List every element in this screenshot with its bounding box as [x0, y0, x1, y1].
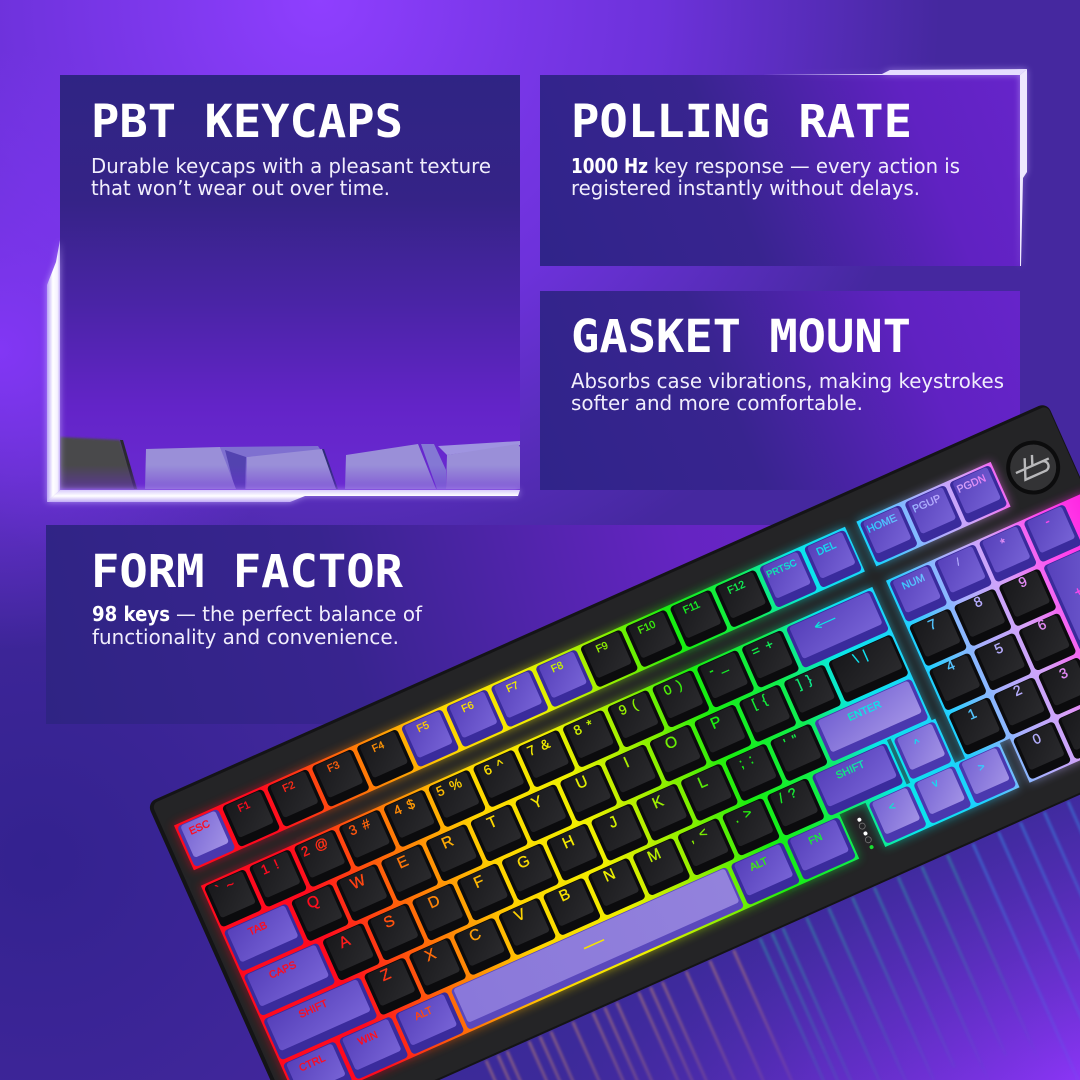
numeric keypad: 9 — [1016, 573, 1030, 591]
main key block: . > — [731, 804, 756, 826]
text: form factor description: — the perfect balance of — [176, 602, 423, 626]
main key block: CTRL — [297, 1052, 327, 1074]
navigation keys — [859, 465, 1008, 563]
main key block: P — [708, 713, 724, 733]
text: polling rate description: key response — every action is — [654, 154, 960, 178]
numeric keypad: NUM — [900, 572, 927, 593]
main key block: M — [645, 845, 664, 866]
function key row: F7 — [505, 679, 521, 695]
text: PBT keycaps description: Durable keycaps with a pleasant texture — [91, 154, 491, 178]
panel: gasket mount — [540, 291, 1020, 490]
function key row: ESC — [187, 818, 212, 838]
main key block: Q — [304, 892, 322, 913]
main key block: FN — [807, 831, 824, 848]
main key block: - _ — [706, 656, 731, 678]
function key row: F11 — [681, 599, 702, 617]
function key row: F10 — [636, 618, 658, 637]
text: form factor description: 98 keys — [92, 602, 170, 626]
main key block — [204, 590, 968, 1080]
text: PBT keycaps description: that won’t wear out over time. — [91, 176, 390, 200]
main key block: SHIFT — [297, 997, 330, 1021]
title: gasket mount: GASKET MOUNT — [571, 310, 911, 363]
text: gasket mount description — [571, 369, 1004, 415]
knob with logo — [998, 432, 1069, 503]
main key block: ` ~ — [213, 876, 238, 898]
text: polling rate description — [571, 154, 960, 200]
text: PBT keycaps description — [91, 154, 491, 200]
text: form factor description — [92, 602, 423, 649]
main key block: E — [395, 853, 411, 872]
main key block: TAB — [246, 919, 269, 938]
main key block: 9 ( — [616, 696, 641, 718]
main key block: N — [601, 866, 618, 886]
function key row — [177, 529, 862, 867]
navigation keys: PGUP — [911, 492, 943, 516]
numeric keypad: 5 — [992, 639, 1006, 657]
arrow keys: ^ — [913, 737, 923, 750]
function key row: DEL — [815, 539, 838, 558]
navigation keys: PGDN — [955, 472, 988, 496]
keyboard — [147, 384, 1080, 1080]
keycaps row illustration — [60, 437, 520, 490]
main key block: , < — [687, 824, 711, 846]
numeric keypad — [889, 504, 1080, 800]
glowing frame corner — [762, 69, 1027, 266]
main key block: 5 % — [434, 775, 465, 800]
main key block: Z — [378, 966, 394, 985]
text: gasket mount description: Absorbs case vibrations, making keystrokes — [571, 369, 1004, 393]
main key block: S — [381, 912, 398, 932]
panel: form factor — [46, 525, 800, 724]
arrow keys — [848, 701, 1017, 844]
main key block: G — [515, 852, 533, 873]
main key block: T — [485, 813, 501, 832]
keyboard case — [147, 402, 1080, 1080]
main key block: H — [560, 832, 577, 853]
main key block: ' " — [781, 731, 802, 751]
main key block: ; : — [736, 751, 757, 771]
main key block: ALT — [748, 855, 770, 874]
main key block: Y — [529, 793, 545, 813]
numeric keypad: 2 — [1011, 681, 1024, 699]
main key block: 7 & — [525, 735, 554, 759]
main key block: 2 @ — [299, 834, 332, 860]
main key block: [ { — [750, 691, 771, 712]
function key row: PRTSC — [765, 558, 799, 581]
numeric keypad: 4 — [944, 656, 957, 674]
text: gasket mount description: softer and more comfortable. — [571, 391, 863, 415]
numeric keypad: 1 — [965, 705, 979, 723]
title: polling rate: POLLING RATE — [571, 95, 912, 148]
main key block: 4 $ — [391, 795, 419, 819]
main key block: C — [467, 925, 484, 945]
main key block: R — [439, 833, 456, 853]
main key block: CAPS — [267, 959, 298, 982]
numeric keypad: - — [1042, 513, 1052, 529]
text: polling rate description: 1000 Hz — [571, 154, 648, 178]
main key block: = + — [749, 636, 777, 659]
main key block: SHIFT — [834, 758, 867, 782]
numeric keypad: / — [954, 556, 962, 568]
function key row: F1 — [236, 799, 252, 815]
function key row: F6 — [460, 699, 476, 715]
motion streaks — [435, 724, 1080, 1080]
glowing frame corner — [47, 240, 520, 502]
arrow keys: < — [887, 800, 898, 814]
main key block: 8 * — [571, 716, 597, 738]
function key row: F4 — [370, 739, 386, 755]
text: form factor description: functionality and convenience. — [92, 625, 399, 649]
main key block: J — [606, 813, 620, 832]
main key block: WIN — [356, 1029, 380, 1048]
numeric keypad: * — [998, 535, 1009, 551]
arrow keys: > — [976, 761, 987, 774]
main key block: D — [426, 892, 443, 912]
main key block: F — [471, 873, 487, 892]
main key block: ALT — [413, 1004, 435, 1023]
main key block: 3 # — [346, 815, 374, 838]
main key block: 6 ^ — [481, 756, 508, 778]
main key block: X — [422, 945, 439, 965]
main key block: 1 ! — [259, 856, 283, 878]
function key row: F2 — [281, 779, 297, 795]
main key block: L — [695, 773, 711, 792]
panel: PBT keycaps — [47, 75, 520, 502]
numeric keypad: 3 — [1057, 664, 1070, 682]
title: PBT keycaps: PBT KEYCAPS — [91, 95, 403, 148]
main key block: V — [512, 905, 529, 925]
main key block: / ? — [776, 784, 800, 806]
main key block: B — [557, 886, 573, 905]
rgb backlight glow — [174, 431, 1080, 1080]
status indicator lights — [856, 817, 875, 850]
arrow keys: v — [930, 777, 941, 790]
main key block: U — [573, 773, 590, 793]
main key block: I — [621, 754, 632, 772]
numeric keypad: 0 — [1030, 730, 1044, 747]
main key block: K — [650, 792, 667, 812]
function key row: F9 — [594, 639, 610, 655]
text: polling rate description: registered instantly without delays. — [571, 176, 920, 200]
function key row: F8 — [549, 659, 565, 675]
numeric keypad: 8 — [971, 593, 985, 611]
function key row: F12 — [726, 578, 747, 597]
main key block: ] } — [794, 671, 816, 692]
function key row: F5 — [415, 719, 431, 735]
main key block: A — [336, 932, 353, 952]
navigation keys: HOME — [865, 512, 899, 536]
numeric keypad: 7 — [925, 615, 939, 633]
main key block: \ | — [851, 646, 871, 666]
function key row: F3 — [325, 759, 342, 775]
main key block: ENTER — [846, 698, 884, 724]
main key block: W — [348, 872, 369, 893]
main key block: 0 ) — [661, 676, 686, 698]
main key block: O — [662, 733, 680, 753]
numeric keypad: 6 — [1035, 616, 1049, 634]
panel: polling rate — [540, 69, 1027, 266]
title: form factor: FORM FACTOR — [91, 545, 404, 598]
